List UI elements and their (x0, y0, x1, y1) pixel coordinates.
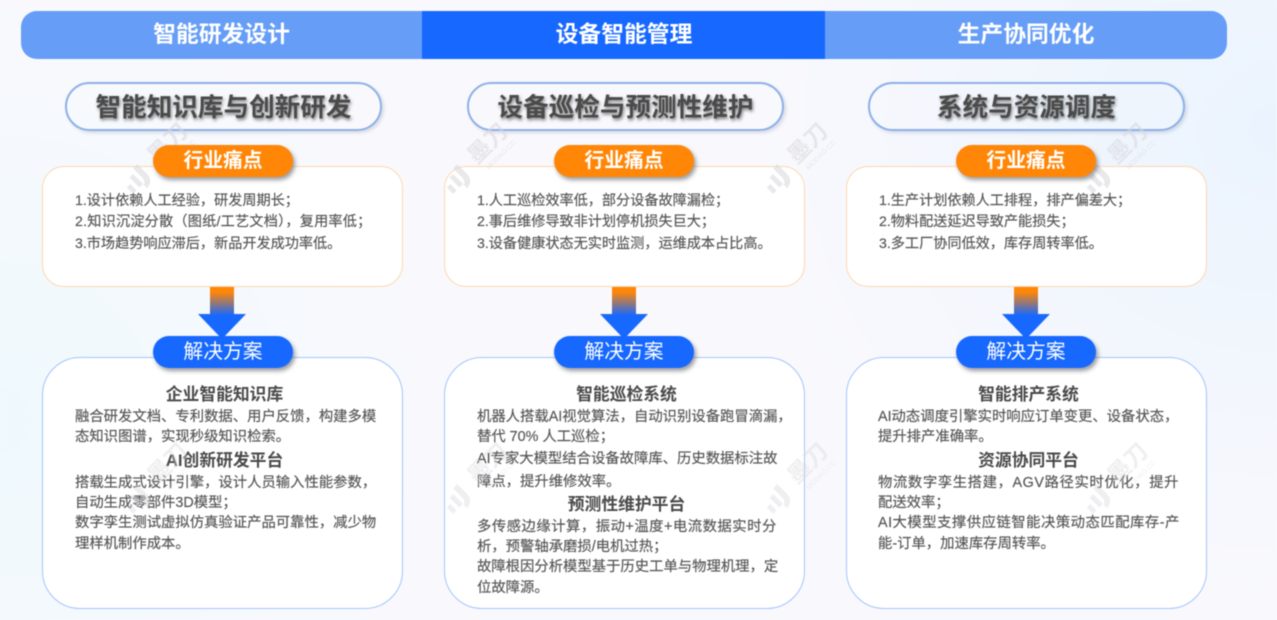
watermark 2: MODAO.CC (485, 139, 518, 171)
text: solution 3 content: 物流数字孪生搭建，AGV路径实时优化，提升 (878, 475, 1179, 491)
text: solution 3 content: 能-订单，加速库存周转率。 (878, 536, 1055, 552)
text: pain points list 1: 1.设计依赖人工经验，研发周期长； (75, 192, 299, 208)
watermark 7: MODAO.CC (805, 459, 838, 491)
text: solution 3 content: 智能排产系统 (978, 385, 1079, 404)
badge: 行业痛点 1: 行业痛点 (183, 150, 263, 172)
badge: 行业痛点 2: 行业痛点 (584, 150, 664, 172)
text: solution 3 content: 配送效率； (878, 495, 950, 511)
heading: 设备巡检与预测性维护: 设备巡检与预测性维护 (498, 94, 753, 122)
text: solution 2 content: 故障根因分析模型基于历史工单与物理机理，定 (477, 559, 778, 575)
watermark 3 (767, 118, 838, 194)
arrow 3 (1002, 286, 1050, 337)
text: solution 2 content: AI专家大模型结合设备故障库、历史数据标注故 (477, 451, 777, 467)
text: solution 1 content: 企业智能知识库 (166, 385, 283, 404)
tab: 生产协同优化: 生产协同优化 (958, 21, 1094, 47)
badge: 解决方案 2: 解决方案 (584, 341, 664, 363)
badge: 解决方案 1 (153, 336, 293, 368)
watermark 1 (127, 118, 198, 194)
text: solution 1 content (74, 384, 376, 552)
badge: 行业痛点 2 (554, 145, 694, 177)
badge: 行业痛点 3 (956, 145, 1096, 177)
watermark 1: MODAO.CC (165, 139, 198, 171)
text: solution 2 content: 预测性维护平台 (568, 495, 685, 514)
watermark 8 (1087, 438, 1158, 514)
watermark 3: 墨刀 (782, 118, 833, 169)
heading: 设备巡检与预测性维护 (467, 82, 784, 131)
watermark 4 (1087, 118, 1158, 194)
badge: 行业痛点 3: 行业痛点 (986, 150, 1066, 172)
text: solution 3 content: 提升排产准确率。 (878, 429, 993, 445)
text: pain points list 3: 3.多工厂协同低效，库存周转率低。 (879, 235, 1103, 251)
badge: 解决方案 3 (956, 336, 1096, 368)
tab: 智能研发设计 (21, 11, 422, 59)
text: pain points list 3: 2.物料配送延迟导致产能损失； (879, 213, 1075, 229)
heading: 系统与资源调度 (868, 82, 1185, 131)
watermark 5 (128, 438, 198, 514)
text: pain points list 2: 3.设备健康状态无实时监测，运维成本占比高。 (477, 235, 772, 251)
watermark 8: 墨刀 (1102, 438, 1153, 489)
heading: 智能知识库与创新研发: 智能知识库与创新研发 (96, 94, 351, 122)
panel: solution 2 (444, 357, 805, 609)
watermark 5: MODAO.CC (165, 459, 198, 491)
arrow 1 (198, 286, 246, 337)
text: pain points list 3 (878, 192, 1131, 251)
text: solution 2 content: 机器人搭载AI视觉算法，自动识别设备跑冒滴漏， (477, 409, 792, 425)
tab: 设备智能管理: 设备智能管理 (556, 21, 692, 47)
heading: 智能知识库与创新研发 (65, 82, 382, 131)
text: pain points list 2: 1.人工巡检效率低，部分设备故障漏检； (477, 192, 729, 208)
watermark 2: 墨刀 (462, 118, 513, 169)
watermark 5: 墨刀 (142, 438, 193, 489)
text: pain points list 2 (476, 192, 772, 251)
text: solution 1 content: AI创新研发平台 (166, 451, 283, 470)
watermark 4: MODAO.CC (1125, 139, 1158, 171)
text: solution 1 content: 融合研发文档、专利数据、用户反馈，构建多模 (75, 409, 376, 425)
tab: 设备智能管理 (422, 11, 826, 59)
panel: solution 3 (846, 357, 1207, 609)
text: solution 1 content: 数字孪生测试虚拟仿真验证产品可靠性，减少物 (75, 515, 376, 531)
text: solution 2 content: 智能巡检系统 (576, 385, 677, 404)
heading: 系统与资源调度: 系统与资源调度 (937, 94, 1116, 122)
watermark 6: 墨刀 (462, 438, 513, 489)
badge: 行业痛点 1 (153, 145, 293, 177)
text: solution 2 content: 障点，提升维修效率。 (477, 474, 620, 490)
watermark 6 (447, 438, 518, 514)
text: solution 3 content: AI大模型支撑供应链智能决策动态匹配库存-产 (878, 515, 1180, 531)
header tab bar (20, 10, 1228, 60)
text: pain points list 3: 1.生产计划依赖人工排程，排产偏差大； (879, 192, 1131, 208)
text: solution 3 content (878, 384, 1180, 552)
watermark 6: MODAO.CC (485, 459, 518, 491)
panel: pain points 1 (42, 166, 403, 287)
badge: 解决方案 1: 解决方案 (183, 341, 263, 363)
text: solution 1 content: 搭载生成式设计引擎，设计人员输入性能参数， (75, 475, 376, 491)
text: solution 1 content: 理样机制作成本。 (75, 536, 190, 552)
watermark 3: MODAO.CC (805, 139, 838, 171)
watermark 7: 墨刀 (782, 438, 833, 489)
watermark 1: 墨刀 (142, 118, 193, 169)
text: solution 2 content: 替代 70% 人工巡检； (477, 429, 614, 445)
text: pain points list 1 (74, 192, 372, 251)
text: pain points list 1: 3.市场趋势响应滞后，新品开发成功率低。 (75, 235, 341, 251)
watermark 4: 墨刀 (1102, 118, 1153, 169)
text: solution 3 content: AI动态调度引擎实时响应订单变更、设备状态， (878, 409, 1178, 425)
panel: pain points 3 (846, 166, 1207, 287)
watermark 8: MODAO.CC (1125, 459, 1158, 491)
badge: 解决方案 3: 解决方案 (986, 341, 1066, 363)
text: solution 3 content: 资源协同平台 (978, 451, 1079, 470)
panel: pain points 2 (444, 166, 805, 287)
text: pain points list 1: 2.知识沉淀分散（图纸/工艺文档），复用率低； (75, 213, 372, 229)
text: solution 2 content: 多传感边缘计算，振动+温度+电流数据实时分 (477, 519, 777, 535)
text: solution 2 content: 析，预警轴承磨损/电机过热； (477, 539, 667, 555)
arrow 2 (600, 286, 648, 337)
text: solution 2 content: 位故障源。 (477, 580, 549, 596)
badge: 解决方案 2 (554, 336, 694, 368)
watermark 7 (767, 438, 838, 514)
tab: 生产协同优化 (825, 11, 1227, 59)
watermark 2 (447, 118, 518, 194)
text: solution 1 content: 态知识图谱，实现秒级知识检索。 (75, 429, 290, 445)
text: pain points list 2: 2.事后维修导致非计划停机损失巨大； (477, 213, 715, 229)
text: solution 2 content (476, 384, 792, 596)
text: solution 1 content: 自动生成零部件3D模型； (75, 495, 237, 511)
tab: 智能研发设计: 智能研发设计 (153, 21, 290, 47)
panel: solution 1 (42, 357, 403, 609)
